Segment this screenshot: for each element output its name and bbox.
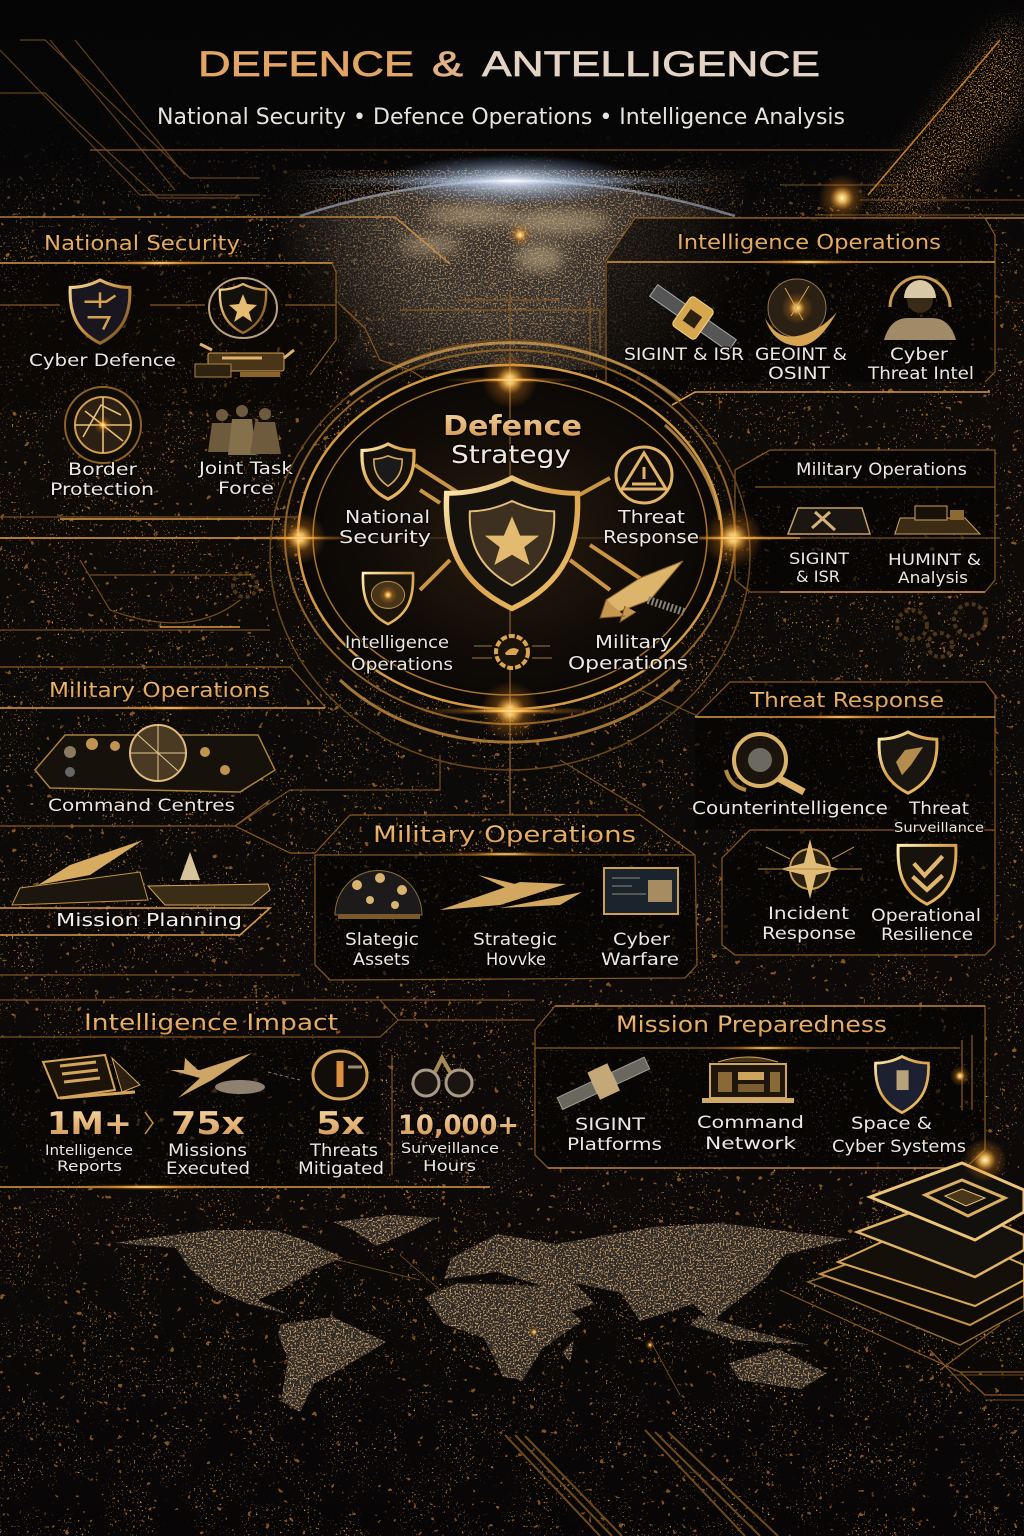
label: strategic assets bbox=[345, 930, 419, 970]
label: national security bbox=[339, 507, 431, 548]
label: sigint and isr right bbox=[789, 549, 849, 586]
gears decoration bbox=[233, 573, 986, 657]
label: threats mitigated: Threats bbox=[309, 1141, 378, 1161]
panel: intelligence operations bbox=[605, 218, 995, 405]
label: sigint platforms: Platforms bbox=[567, 1135, 662, 1155]
bottom circuit traces bbox=[505, 1375, 1024, 1536]
heading: defence: Defence bbox=[443, 409, 582, 442]
heading: mission preparedness: Mission Preparedness bbox=[616, 1013, 887, 1038]
label: geoint and osint: OSINT bbox=[768, 364, 831, 384]
heading: military operations left: Military Operations bbox=[49, 678, 270, 702]
stat: 1M+: 1M+ bbox=[47, 1106, 132, 1142]
label: command network: Network bbox=[705, 1134, 796, 1154]
heading: military operations centre: Military Operations bbox=[373, 823, 636, 848]
label: strategic assets: Slategic bbox=[345, 930, 419, 950]
label: cyber threat intel: Cyber bbox=[890, 345, 948, 365]
heading: national security: National Security bbox=[44, 231, 240, 255]
label: strategic assets: Assets bbox=[353, 950, 410, 970]
label: threat surveillance bbox=[894, 799, 984, 836]
label: sigint and isr: SIGINT & ISR bbox=[624, 345, 744, 365]
label: strategic hawke bbox=[473, 930, 557, 970]
label: operational resilience bbox=[871, 906, 981, 945]
heading: threat response: Threat Response bbox=[749, 688, 944, 712]
icon: command table bbox=[35, 725, 275, 792]
label: intelligence reports: Reports bbox=[57, 1159, 122, 1175]
label: humint and analysis: HUMINT & bbox=[888, 550, 981, 569]
icon: missile bbox=[600, 561, 684, 622]
icon: national security shield bbox=[362, 444, 414, 499]
icon: magnifier bbox=[726, 734, 804, 792]
heading: strategy: Strategy bbox=[451, 440, 571, 469]
label: surveillance hours: Surveillance bbox=[401, 1141, 499, 1157]
label: intelligence reports bbox=[45, 1143, 133, 1175]
label: incident response: Response bbox=[762, 924, 856, 944]
icon: border protection bbox=[65, 387, 141, 463]
title bbox=[198, 45, 820, 84]
label: command centres: Command Centres bbox=[48, 796, 235, 816]
heading: intelligence impact: Intelligence Impact bbox=[84, 1011, 338, 1036]
label: border protection: Protection bbox=[50, 480, 154, 500]
label: operational resilience: Resilience bbox=[881, 925, 973, 945]
label: threat surveillance: Surveillance bbox=[894, 821, 984, 836]
label: strategic hawke: Hovvke bbox=[486, 950, 546, 970]
heading: intelligence operations: Intelligence Operations bbox=[677, 230, 941, 254]
label: command network bbox=[697, 1113, 804, 1154]
connector lines bbox=[0, 517, 1000, 826]
label: sigint and isr right: SIGINT bbox=[789, 549, 849, 568]
label: threat response: Response bbox=[603, 527, 699, 548]
label: threats mitigated bbox=[298, 1141, 384, 1179]
icon: incident compass bbox=[758, 839, 862, 899]
label: command network: Command bbox=[697, 1113, 804, 1133]
panel: military operations right bbox=[735, 450, 995, 592]
label: joint task force: Force bbox=[218, 479, 274, 499]
icon: satellite bbox=[643, 276, 743, 360]
panel: intelligence impact bbox=[0, 975, 535, 1187]
icon: field device bbox=[195, 344, 294, 377]
label: cyber threat intel: Threat Intel bbox=[867, 364, 974, 384]
chevron bbox=[145, 1112, 153, 1134]
panel: national security bbox=[0, 231, 360, 500]
stat: 5x: 5x bbox=[316, 1106, 365, 1142]
label: humint and analysis: Analysis bbox=[898, 568, 968, 587]
title: & bbox=[432, 45, 463, 84]
label: surveillance hours: Hours bbox=[423, 1157, 476, 1175]
label: national security: Security bbox=[339, 527, 431, 548]
connector spokes bbox=[415, 465, 650, 590]
icon: threat warning bbox=[616, 447, 672, 503]
icon: analyst bbox=[884, 277, 956, 340]
icon: intelligence shield bbox=[363, 573, 413, 624]
divider: impact bottom bbox=[0, 1184, 490, 1190]
icon: humint desk bbox=[895, 506, 980, 534]
heading: military operations right: Military Operations bbox=[796, 460, 967, 480]
icon: reports bbox=[43, 1055, 140, 1098]
label: missions executed: Missions bbox=[168, 1141, 247, 1161]
label: military operations bbox=[568, 632, 688, 674]
icon: sigint satellite bbox=[553, 1048, 653, 1116]
label: incident response: Incident bbox=[768, 904, 849, 924]
icon: jet bbox=[170, 1053, 300, 1098]
icon: strategic dome bbox=[335, 871, 422, 919]
label: geoint and osint bbox=[755, 345, 847, 384]
world map bbox=[115, 1215, 850, 1412]
label: cyber warfare bbox=[601, 930, 679, 970]
icon: aircraft bbox=[440, 875, 582, 910]
panel: mission preparedness bbox=[535, 1006, 985, 1168]
central strategy hub bbox=[240, 340, 813, 815]
label: border protection bbox=[50, 460, 154, 500]
icon: emblem shield bbox=[209, 278, 277, 338]
label: geoint and osint: GEOINT & bbox=[755, 345, 847, 365]
label: joint task force bbox=[198, 459, 293, 499]
label: cyber defence: Cyber Defence bbox=[29, 351, 176, 371]
panel: military operations centre bbox=[315, 815, 697, 980]
label: space and cyber systems: Cyber Systems bbox=[832, 1137, 966, 1157]
label: strategic hawke: Strategic bbox=[473, 930, 557, 950]
icon: globe bbox=[765, 279, 837, 346]
gold dust streak bbox=[850, 7, 1024, 225]
stat: 10,000+: 10,000+ bbox=[398, 1110, 519, 1141]
label: military operations: Military bbox=[595, 632, 672, 653]
stat: 75x: 75x bbox=[171, 1106, 245, 1142]
earth horizon bbox=[280, 156, 744, 370]
icon: joint task force bbox=[208, 405, 281, 455]
label: cyber warfare: Warfare bbox=[601, 950, 679, 970]
icon: command building bbox=[702, 1057, 794, 1103]
panel: threat response bbox=[692, 682, 995, 955]
label: missions executed bbox=[166, 1141, 250, 1179]
label: threat response: Threat bbox=[617, 507, 685, 528]
label: space and cyber systems bbox=[832, 1114, 966, 1157]
icon: hub emblem bbox=[472, 636, 552, 668]
label: humint and analysis bbox=[888, 550, 981, 587]
label: operational resilience: Operational bbox=[871, 906, 981, 926]
icon: jet and ship bbox=[12, 840, 270, 905]
label: missions executed: Executed bbox=[166, 1159, 250, 1179]
icon: layered stack bbox=[780, 1138, 1024, 1395]
label: incident response bbox=[762, 904, 856, 944]
icon: cyber defence shield bbox=[70, 280, 130, 343]
circuit lines top bbox=[0, 40, 1024, 395]
title: DEFENCE bbox=[198, 45, 414, 84]
label: sigint platforms: SIGINT bbox=[575, 1115, 646, 1135]
label: mission planning: Mission Planning bbox=[56, 910, 242, 931]
label: space and cyber systems: Space & bbox=[851, 1114, 932, 1134]
central shield bbox=[446, 478, 578, 609]
label: threats mitigated: Mitigated bbox=[298, 1159, 384, 1179]
icon: space shield bbox=[875, 1056, 929, 1113]
label: sigint and isr right: & ISR bbox=[796, 567, 840, 586]
label: intelligence operations: Intelligence bbox=[345, 633, 449, 653]
icon: sigint console bbox=[788, 508, 870, 534]
label: national security: National bbox=[345, 507, 430, 528]
label: intelligence reports: Intelligence bbox=[45, 1143, 133, 1159]
label: cyber threat intel bbox=[867, 345, 974, 384]
icon: mitigated target bbox=[313, 1051, 367, 1099]
icon: resilience shield bbox=[898, 845, 956, 904]
label: counterintelligence: Counterintelligence bbox=[692, 798, 888, 819]
panel: military operations left bbox=[0, 667, 326, 935]
label: joint task force: Joint Task bbox=[198, 459, 293, 479]
icon: threat surveillance shield bbox=[879, 732, 937, 793]
label: intelligence operations: Operations bbox=[351, 655, 453, 675]
label: intelligence operations bbox=[345, 633, 453, 675]
title: ANTELLIGENCE bbox=[482, 45, 820, 84]
label: sigint platforms bbox=[567, 1115, 662, 1155]
label: surveillance hours bbox=[401, 1141, 499, 1175]
label: border protection: Border bbox=[68, 460, 137, 480]
label: military operations: Operations bbox=[568, 653, 688, 674]
subtitle: National Security • Defence Operations • Intelligence Analysis bbox=[157, 105, 845, 130]
icon: cyber monitor bbox=[604, 868, 678, 914]
label: cyber warfare: Cyber bbox=[613, 930, 670, 950]
label: threat response bbox=[603, 507, 699, 548]
label: threat surveillance: Threat bbox=[908, 799, 969, 819]
icon: binoculars bbox=[413, 1058, 472, 1096]
